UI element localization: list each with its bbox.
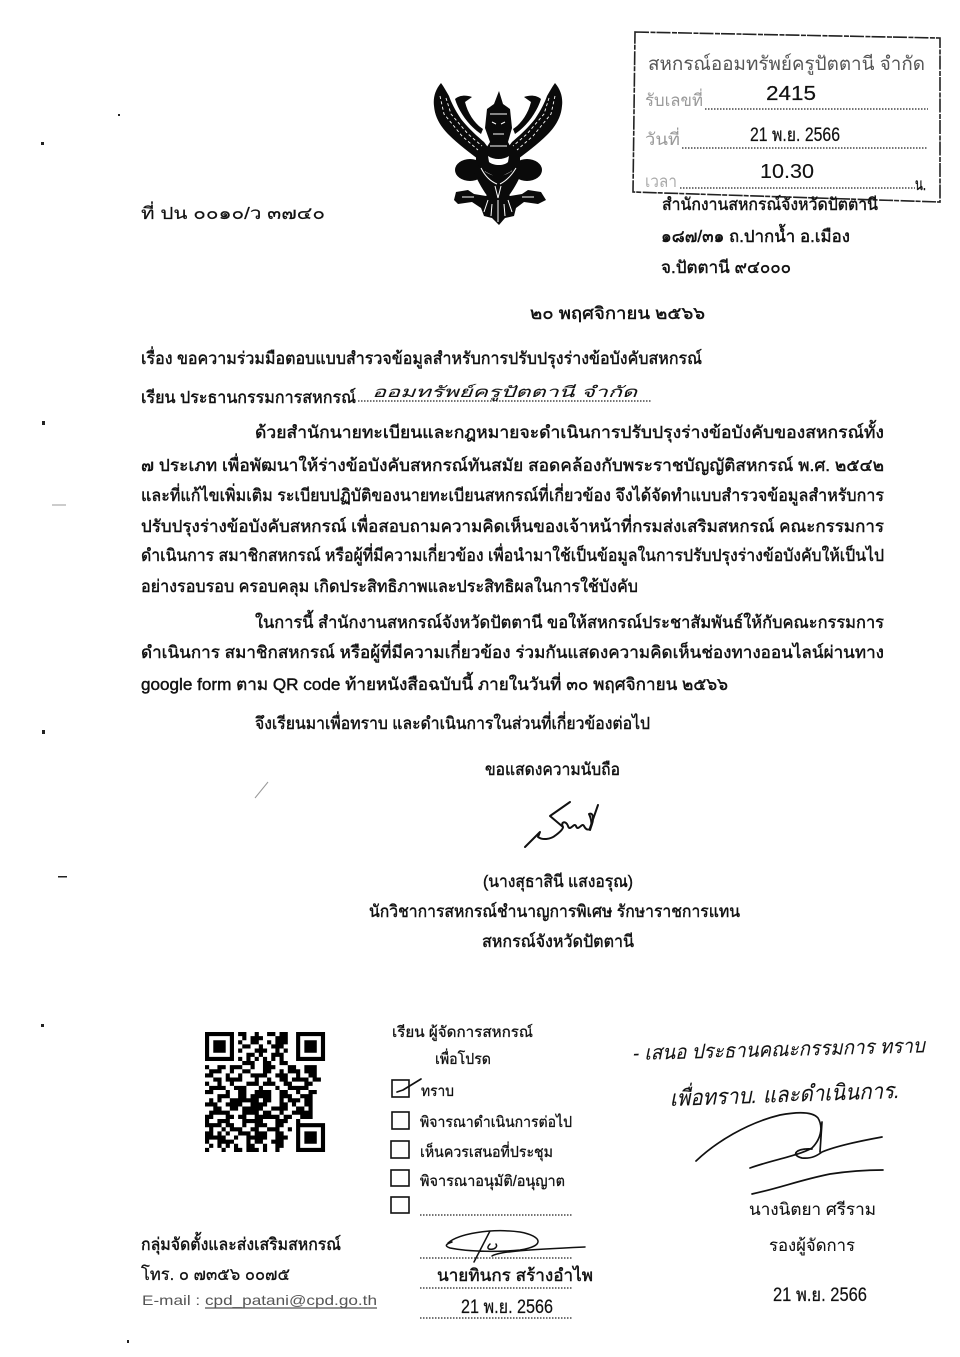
stamp date value: 21 พ.ย. 2566 xyxy=(750,125,840,146)
paragraph 2: ดำเนินการ สมาชิกสหกรณ์ หรือผู้ที่มีความเกี่ยวข้อง ร่วมกันแสดงความคิดเห็นช่องทางออนไลน์ผ่านทาง xyxy=(141,640,884,663)
stamp time suffix: น. xyxy=(915,175,926,194)
deputy manager name block: นางนิตยา ศรีราม xyxy=(749,1200,876,1219)
QR code xyxy=(205,1032,325,1152)
stamp received number: รับเลขที่ xyxy=(645,88,703,110)
paragraph 2: google form ตาม QR code ท้ายหนังสือฉบับนี้ ภายในวันที่ ๓๐ พฤศจิกายน ๒๕๖๖ xyxy=(141,672,728,694)
paragraph 2 xyxy=(141,610,884,694)
paragraph 1: และที่แก้ไขเพิ่มเติม ระเบียบปฏิบัติของนายทะเบียนสหกรณ์ที่เกี่ยวข้อง จึงได้จัดทำแบบสำรวจข้อมูลสำหรับการ xyxy=(141,483,884,506)
signatory name block: (นางสุธาสินี แสงอรุณ) xyxy=(483,872,633,892)
routing checklist xyxy=(391,1024,572,1215)
paragraph 1: ปรับปรุงร่างข้อบังคับสหกรณ์ เพื่อสอบถามความคิดเห็นของเจ้าหน้าที่กรมส่งเสริมสหกรณ์ คณะกรรมการ xyxy=(141,514,884,537)
checkbox: checked acknowledge xyxy=(392,1079,454,1100)
checkbox: other xyxy=(391,1197,572,1215)
signature: receiving officer xyxy=(446,1231,585,1262)
addressee: ออมทรัพย์ครูปัตตานี จำกัด xyxy=(372,383,639,401)
checkbox: propose to meeting xyxy=(391,1141,553,1162)
subject: เรื่อง ขอความร่วมมือตอบแบบสำรวจข้อมูลสำหรับการปรับปรุงร่างข้อบังคับสหกรณ์ xyxy=(141,346,702,369)
stamp time label: เวลา xyxy=(645,172,677,191)
signature: deputy manager xyxy=(696,1113,883,1194)
stamp: savings cooperative receipt xyxy=(633,32,940,202)
contact block xyxy=(141,1232,377,1308)
routing heading: เรียน ผู้จัดการสหกรณ์ xyxy=(392,1024,533,1041)
checkbox: approve xyxy=(391,1170,565,1191)
sign-off: receiving officer: 21 พ.ย. 2566 xyxy=(461,1297,553,1318)
sender address xyxy=(661,195,878,277)
handwritten instruction xyxy=(633,1035,927,1111)
deputy manager name block: 21 พ.ย. 2566 xyxy=(773,1285,867,1306)
closing sentence: จึงเรียนมาเพื่อทราบ และดำเนินการในส่วนที่เกี่ยวข้องต่อไป xyxy=(255,711,650,733)
paragraph 2: ในการนี้ สำนักงานสหกรณ์จังหวัดปัตตานี ขอให้สหกรณ์ประชาสัมพันธ์ให้กับคณะกรรมการ xyxy=(255,610,884,632)
stamp heading: สหกรณ์ออมทรัพย์ครูปัตตานี จำกัด xyxy=(648,53,925,75)
contact block: กลุ่มจัดตั้งและส่งเสริมสหกรณ์ xyxy=(141,1232,341,1255)
signatory name block: สหกรณ์จังหวัดปัตตานี xyxy=(482,932,634,951)
contact block: E-mail : cpd_patani@cpd.go.th xyxy=(142,1292,377,1308)
signatory name block xyxy=(369,872,740,951)
signature: signatory xyxy=(525,802,598,847)
reference number: ที่ ปน ๐๐๑๐/ว ๓๗๔๐ xyxy=(141,201,325,223)
sender address: สำนักงานสหกรณ์จังหวัดปัตตานี xyxy=(662,195,878,214)
handwritten instruction: - เสนอ ประธานคณะกรรมการ ทราบ xyxy=(633,1035,927,1065)
salutation: ขอแสดงความนับถือ xyxy=(485,760,620,779)
stamp border xyxy=(633,32,940,202)
sender address: ๑๘๗/๓๑ ถ.ปากน้ำ อ.เมือง xyxy=(661,224,850,246)
paragraph 1: ดำเนินการ สมาชิกสหกรณ์ หรือผู้ที่มีความเกี่ยวข้อง เพื่อนำมาใช้เป็นข้อมูลในการปรับปรุงร่างข้อบังคับให้เป็นไป xyxy=(141,543,884,566)
checkbox: approve: พิจารณาอนุมัติ/อนุญาต xyxy=(420,1173,565,1191)
signatory name block: นักวิชาการสหกรณ์ชำนาญการพิเศษ รักษาราชการแทน xyxy=(369,902,740,921)
paragraph 1: ด้วยสำนักนายทะเบียนและกฎหมายจะดำเนินการปรับปรุงร่างข้อบังคับของสหกรณ์ทั้ง xyxy=(255,420,884,443)
routing subheading: เพื่อโปรด xyxy=(435,1048,491,1068)
checkbox: proceed: พิจารณาดำเนินการต่อไป xyxy=(420,1113,572,1131)
checkbox: propose to meeting: เห็นควรเสนอที่ประชุม xyxy=(420,1141,553,1162)
stamp time value: 10.30 xyxy=(760,161,814,183)
paragraph 1 xyxy=(141,420,884,597)
handwritten instruction: เพื่อทราบ. และดำเนินการ. xyxy=(669,1075,900,1111)
checkbox: checked acknowledge: ทราบ xyxy=(421,1083,454,1100)
addressee xyxy=(141,383,652,407)
date: ๒๐ พฤศจิกายน ๒๕๖๖ xyxy=(530,304,705,323)
deputy manager name block xyxy=(749,1200,876,1306)
deputy manager name block: รองผู้จัดการ xyxy=(769,1236,855,1256)
sign-off: receiving officer: นายทินกร สร้างอำไพ xyxy=(437,1265,593,1285)
icon: Garuda emblem xyxy=(434,83,562,225)
stamp date label: วันที่ xyxy=(645,127,680,149)
stamp number value: 2415 xyxy=(766,83,816,105)
sender address: จ.ปัตตานี ๙๔๐๐๐ xyxy=(661,258,791,277)
paragraph 1: ๗ ประเภท เพื่อพัฒนาให้ร่างข้อบังคับสหกรณ์ทันสมัย สอดคล้องกับพระราชบัญญัติสหกรณ์ พ.ศ. ๒๕๔๒ xyxy=(141,453,884,475)
addressee: เรียน ประธานกรรมการสหกรณ์ xyxy=(141,388,356,407)
paragraph 1: อย่างรอบรอบ ครอบคลุม เกิดประสิทธิภาพและประสิทธิผลในการใช้บังคับ xyxy=(141,576,638,597)
sign-off: receiving officer xyxy=(420,1231,593,1318)
contact block: โทร. ๐ ๗๓๕๖ ๐๐๗๕ xyxy=(141,1264,290,1284)
